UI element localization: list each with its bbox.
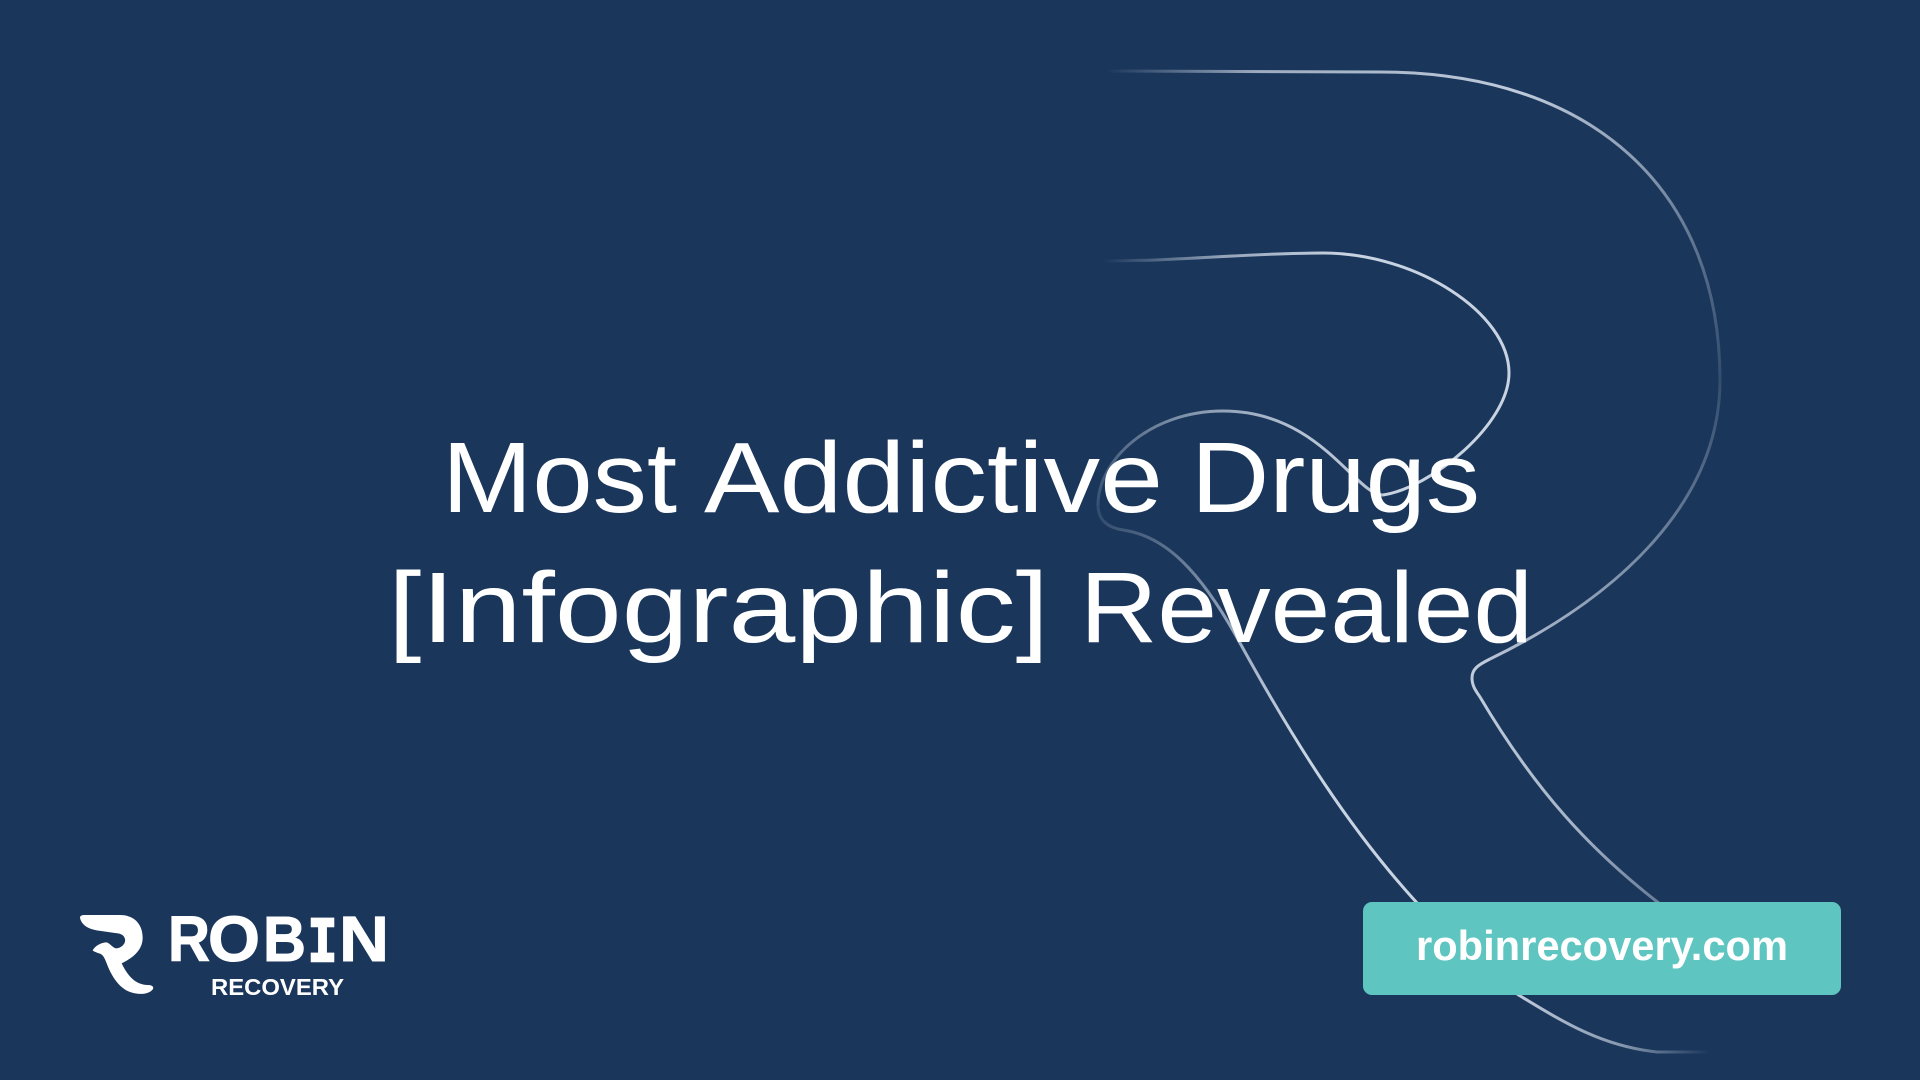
title line 1: Drugs — [1191, 422, 1480, 534]
logo wordmark: I — [308, 909, 337, 981]
title — [388, 422, 1533, 664]
icon: stylised R — [80, 915, 153, 994]
title line 2: Revealed — [1080, 552, 1533, 664]
logo wordmark: O — [208, 903, 260, 975]
logo wordmark: B — [263, 903, 306, 975]
title line 1: Addictive — [704, 422, 1163, 534]
title line 2: [Infographic] — [388, 552, 1049, 664]
logo wordmark: R — [168, 903, 210, 975]
website button — [1363, 902, 1841, 995]
title line 1: Most — [442, 422, 677, 534]
logo: Robin Recovery — [80, 903, 389, 1000]
logo subtitle: RECOVERY — [211, 974, 344, 1000]
logo wordmark: N — [339, 903, 389, 975]
button label: robinrecovery.com — [1416, 922, 1788, 969]
decorative R outline — [1098, 71, 1720, 1052]
button background — [1363, 902, 1841, 995]
